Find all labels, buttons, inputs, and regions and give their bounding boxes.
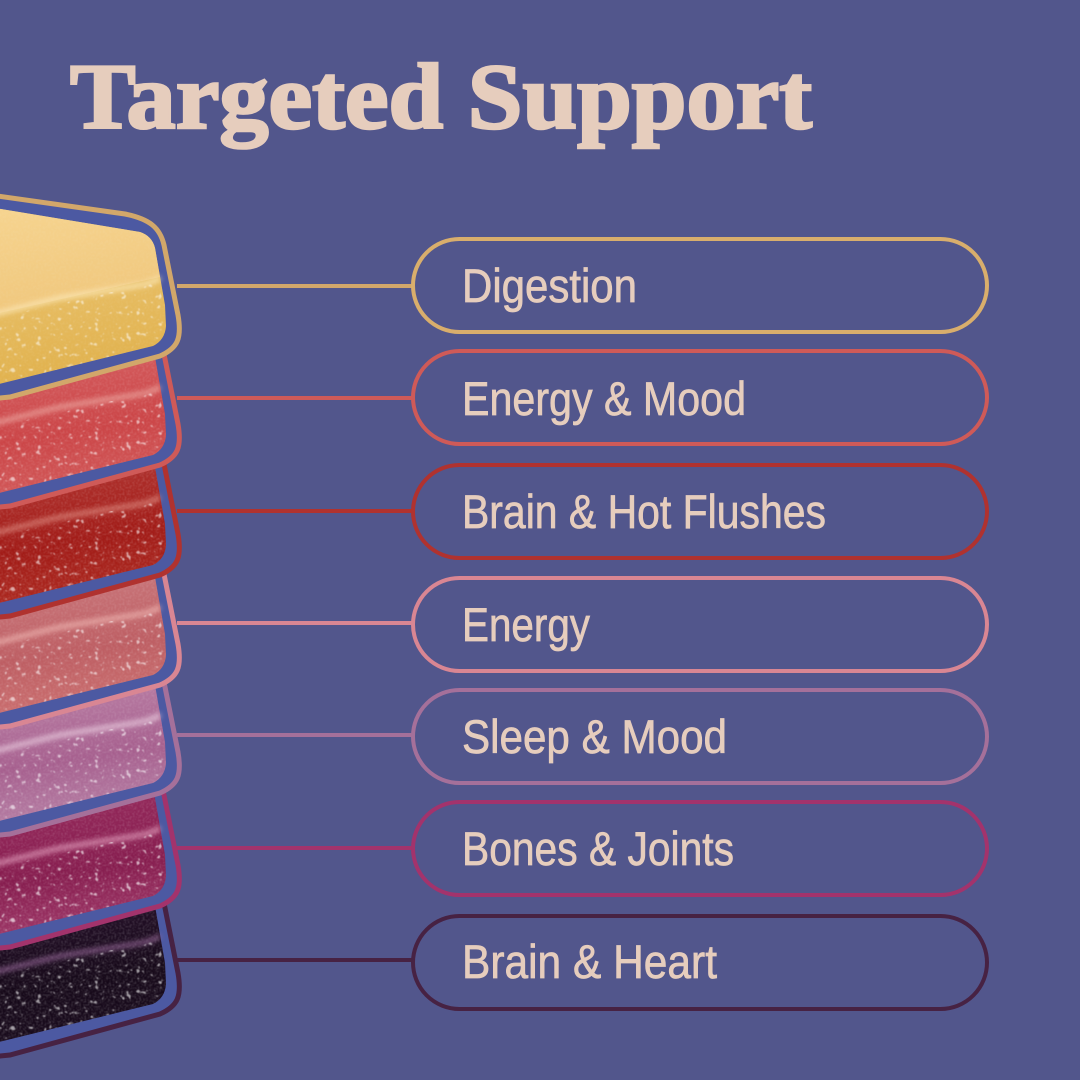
- pill: Brain & Heart: Brain & Heart: [462, 935, 717, 988]
- pill: Sleep & Mood: Sleep & Mood: [462, 710, 727, 763]
- pill: Energy: Energy: [462, 598, 590, 651]
- pill: Energy & Mood: [413, 351, 987, 444]
- gummy: coral: [0, 355, 182, 510]
- title: Targeted Support: [70, 46, 812, 149]
- gummy: deep red: [0, 464, 182, 620]
- gummy: dark purple: [0, 905, 182, 1058]
- pill: Brain & Hot Flushes: Brain & Hot Flushes: [462, 485, 826, 538]
- gummy: gold: [0, 195, 179, 399]
- gummy: magenta: [0, 792, 182, 950]
- pill: Bones & Joints: Bones & Joints: [462, 822, 734, 875]
- pill: Sleep & Mood: [413, 690, 987, 783]
- pill: Brain & Hot Flushes: [413, 465, 987, 558]
- connector lines: [177, 286, 414, 960]
- pill: Digestion: Digestion: [462, 259, 637, 312]
- pill: Digestion: [413, 239, 987, 332]
- pill: Energy: [413, 578, 987, 671]
- gummy: mauve: [0, 684, 182, 838]
- pill: Bones & Joints: [413, 802, 987, 895]
- pill: Brain & Heart: [413, 916, 987, 1009]
- pill: Energy & Mood: Energy & Mood: [462, 372, 746, 425]
- gummy stack illustration: [0, 195, 179, 1057]
- gummy: pink: [0, 574, 182, 730]
